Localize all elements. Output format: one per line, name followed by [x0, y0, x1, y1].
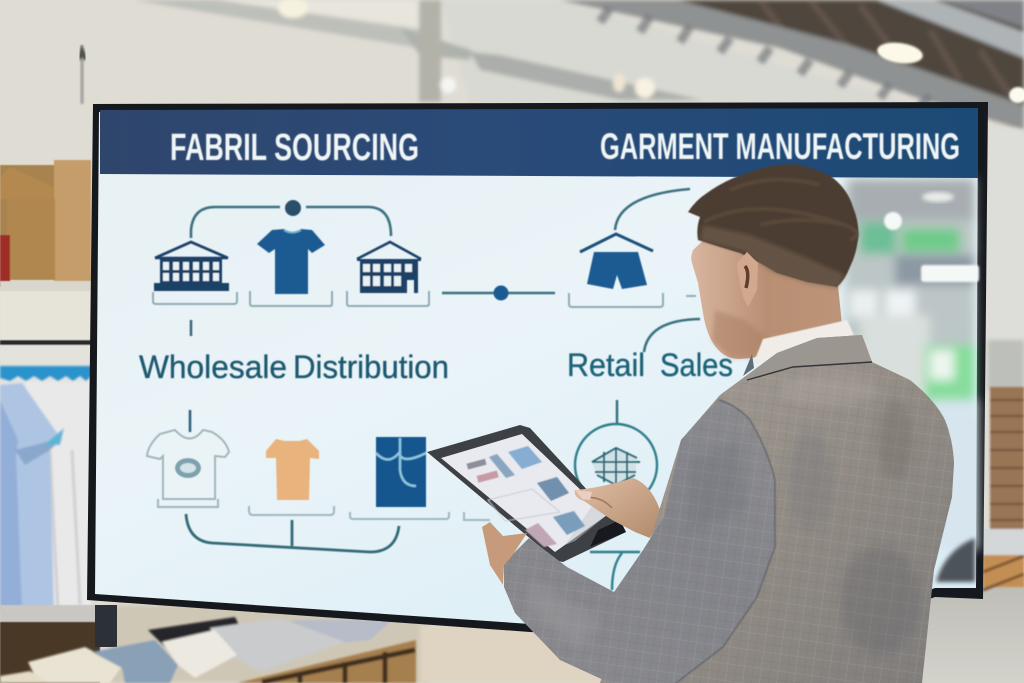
icon: warehouse	[153, 242, 237, 304]
hanging pole	[80, 50, 85, 104]
jacket sleeve	[504, 398, 775, 683]
label: retail sales: Sales	[660, 347, 733, 383]
connector: center node	[442, 286, 555, 300]
floor right	[915, 576, 1024, 683]
connector: top arc	[191, 200, 391, 238]
transparent store view	[845, 178, 978, 550]
connector: bottom bracket	[186, 514, 399, 552]
right hand	[575, 478, 661, 538]
ceiling beam and pillar	[133, 0, 920, 105]
ear	[737, 252, 758, 307]
icon: blue t-shirt	[250, 229, 332, 306]
monitor	[87, 102, 988, 645]
label: wholesale distribution: Distribution	[293, 349, 449, 385]
shirt collar	[753, 320, 854, 365]
label: wholesale distribution	[139, 349, 449, 385]
lower shelf	[0, 605, 100, 622]
header band	[100, 108, 978, 178]
connector tick	[190, 320, 192, 336]
icon: outline t-shirt	[147, 410, 229, 507]
tablet thumbnails	[467, 446, 585, 547]
jacket patches	[780, 375, 920, 655]
left hand	[482, 522, 527, 585]
shelf and rack left	[0, 281, 92, 608]
stacked pallets right	[983, 387, 1024, 590]
boxes left	[0, 160, 91, 287]
icon: shorts on hanger	[569, 189, 696, 307]
neck and face	[691, 225, 854, 376]
hair	[688, 164, 858, 289]
connector: retail arc	[644, 319, 700, 352]
jacket body	[600, 335, 954, 683]
monitor frame	[87, 102, 988, 645]
label: retail sales	[567, 347, 733, 383]
man	[504, 164, 954, 683]
icon: orange t-shirt	[249, 439, 334, 515]
icon: factory building	[347, 242, 429, 306]
label: wholesale distribution: Wholesale	[139, 349, 287, 385]
folded clothes	[0, 617, 416, 683]
jacket collar	[722, 335, 872, 394]
icon: basket in circle	[575, 400, 657, 590]
hanging shirts	[0, 366, 92, 615]
tablet	[427, 425, 626, 562]
heading: fabric sourcing: FABRIL SOURCING	[170, 127, 419, 169]
screen	[95, 110, 978, 635]
label: retail sales: Retail	[567, 347, 645, 383]
ceiling truss	[560, 0, 1024, 130]
right wall	[988, 130, 1024, 340]
icon: blue garment	[350, 437, 490, 520]
